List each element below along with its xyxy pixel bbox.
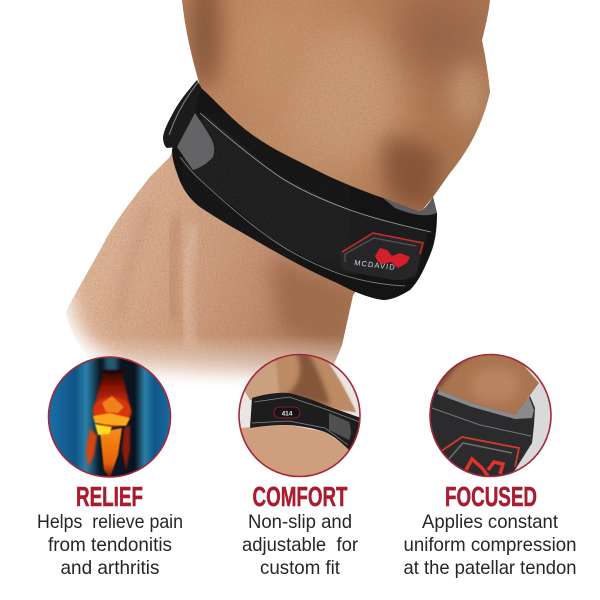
strap inner rim [383,197,437,215]
photo: knee with strap [66,0,490,397]
text: relief description: Helps relieve pain [37,511,183,533]
text: focused description: uniform compression [404,534,576,556]
panel: comfort [238,352,362,579]
leg fade-out [30,290,335,410]
text: focused description [404,511,576,579]
icon: strap close-up with logo [425,352,553,480]
text: focused description: at the patellar tendon [404,557,576,579]
strap centre panel [182,113,428,278]
panel: focused [404,352,576,579]
outer flap [163,80,201,148]
text: comfort description [242,511,358,579]
panel: relief [37,352,183,579]
velcro tab [177,113,214,170]
text: relief description: from tendonitis [48,534,172,556]
text: comfort description: Non-slip and [248,511,352,533]
badge [340,232,423,280]
heading: relief: RELIEF [76,481,143,512]
icon: strap side view [238,352,362,482]
logo: M mark [375,248,410,268]
strap model number: 414 [282,410,293,418]
stitching [200,113,431,232]
strap [163,80,437,300]
leg [66,0,490,397]
text: relief description: and arthritis [60,557,160,579]
text: focused description: Applies constant [422,511,559,533]
text: relief description [37,511,183,579]
heading: comfort: COMFORT [252,481,348,512]
badge wordmark: MCDAVID [354,258,396,272]
icon: glowing knee joint [48,352,172,479]
text: comfort description: adjustable for [242,534,358,556]
heading: focused: FOCUSED [445,481,537,512]
text: comfort description: custom fit [260,557,341,579]
